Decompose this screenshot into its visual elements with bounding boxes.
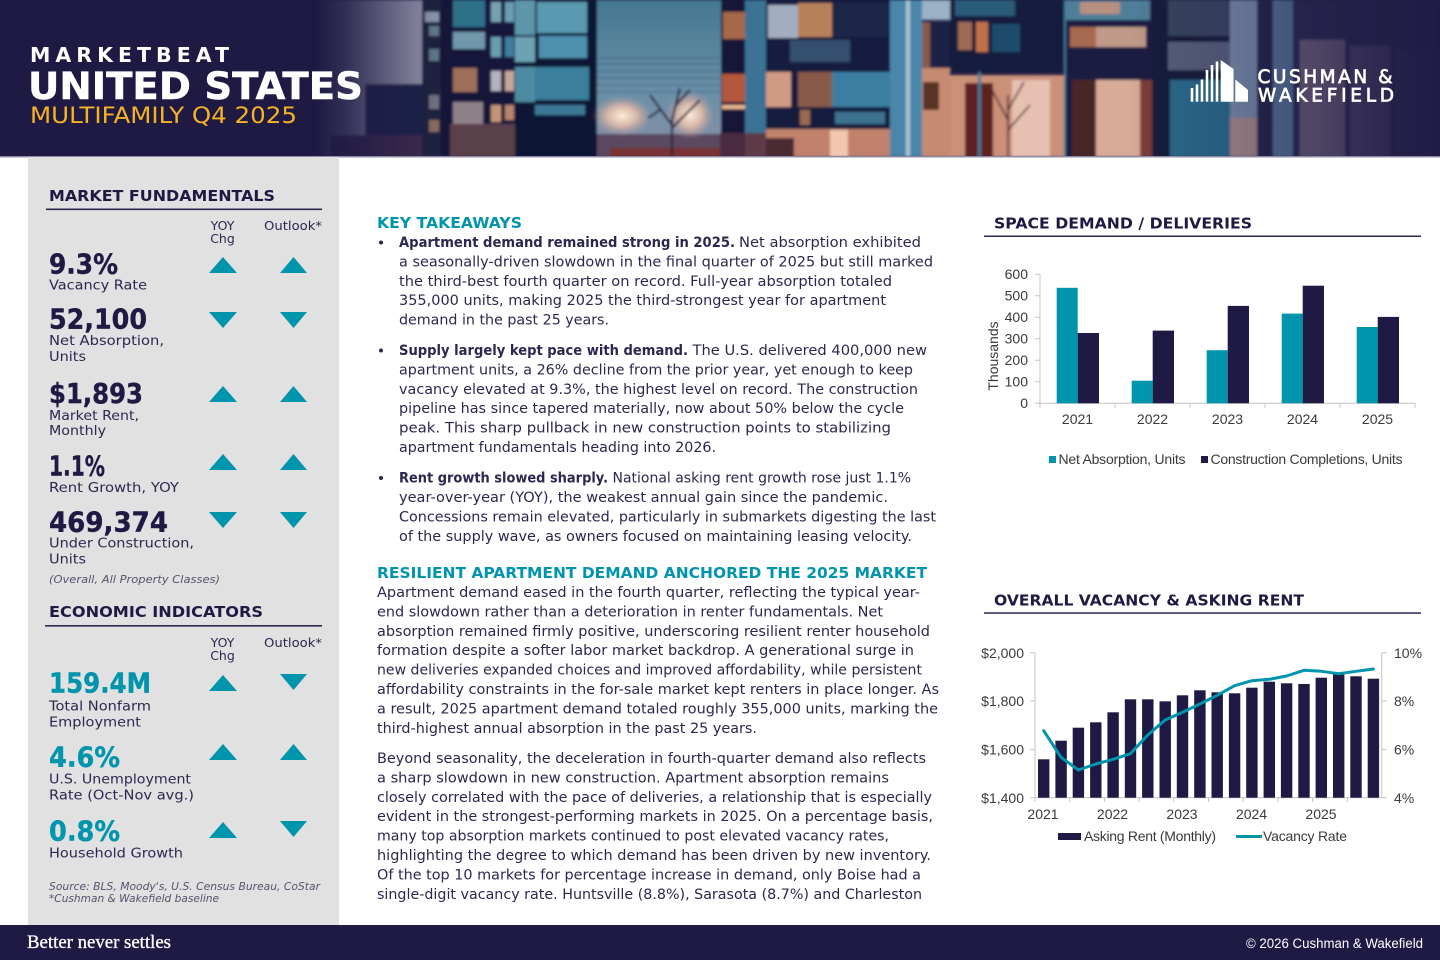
metric: household growth <box>49 814 307 862</box>
x axis labels: 2023 <box>1166 806 1198 822</box>
axes <box>1030 653 1387 802</box>
bullet: apartment demand: the third-best fourth quarter on record. Full-year absorption totaled <box>399 274 892 290</box>
bullet: rent growth: of the supply wave, as owners focused on maintaining leasing velocity. <box>399 529 912 545</box>
footer bar <box>0 925 1440 960</box>
paragraph: fourth quarter demand: affordability constraints in the for-sale market kept renters in place longer. As <box>377 682 939 698</box>
left axis labels: $1,600 <box>981 742 1024 758</box>
x axis labels: 2024 <box>1287 411 1318 427</box>
paragraph: seasonality: closely correlated with the pace of deliveries, a relationship that is especially <box>377 790 932 806</box>
bullet: apartment demand: Net absorption exhibited <box>739 235 921 251</box>
paragraph: seasonality: Of the top 10 markets for percentage increase in demand, only Boise had a <box>377 867 921 883</box>
bullet: apartment demand: 355,000 units, making 2025 the third-strongest year for apartment <box>399 293 886 309</box>
x axis labels: 2025 <box>1305 806 1337 822</box>
metric: rent growth: Rent Growth, YOY <box>49 480 180 496</box>
bullet: supply: vacancy elevated at 9.3%, the highest level on record. The construction <box>399 382 918 398</box>
metric: under construction: 469,374 <box>49 506 168 538</box>
x axis labels: 2022 <box>1097 806 1128 822</box>
bullet: supply: Supply largely kept pace with demand. <box>399 343 688 359</box>
left axis labels <box>981 645 1024 806</box>
photo: apartment buildings at dusk <box>317 0 1440 157</box>
title: UNITED STATES: UNITED STATES <box>28 64 363 108</box>
paragraph: seasonality: highlighting the degree to which demand has been driven by new inventory. <box>377 848 931 864</box>
header banner <box>0 0 1440 158</box>
heading: economic indicators: ECONOMIC INDICATORS <box>49 603 263 621</box>
logo: Cushman & Wakefield: WAKEFIELD <box>1258 86 1394 107</box>
paragraph: fourth quarter demand: Apartment demand eased in the fourth quarter, reflecting the typical year- <box>377 585 920 601</box>
paragraph: seasonality <box>377 751 933 903</box>
report title block <box>28 43 363 129</box>
bullet: rent growth: Concessions remain elevated, particularly in submarkets digesting the last <box>399 509 936 525</box>
metric: unemployment rate: 4.6% <box>49 740 120 774</box>
source note <box>49 881 321 905</box>
metric: household growth: Household Growth <box>49 846 183 862</box>
logo: Cushman & Wakefield: CUSHMAN & <box>1258 67 1392 88</box>
bullet: apartment demand: a seasonally-driven slowdown in the final quarter of 2025 but still marked <box>399 254 933 270</box>
legend <box>1058 828 1347 844</box>
metric: total nonfarm employment: Employment <box>49 714 141 730</box>
y axis labels: 500 <box>1005 288 1028 304</box>
metric: total nonfarm employment <box>48 666 307 730</box>
metric: total nonfarm employment: Total Nonfarm <box>48 698 151 714</box>
axis title: thousands: Thousands <box>985 321 1001 391</box>
y axis labels: 0 <box>1020 395 1028 411</box>
x axis labels: 2023 <box>1212 411 1243 427</box>
metric: net absorption: 52,100 <box>49 302 147 336</box>
paragraph: seasonality: single-digit vacancy rate. Huntsville (8.8%), Sarasota (8.7%) and Charleston <box>377 887 922 903</box>
bullet: rent growth: Rent growth slowed sharply. <box>399 470 608 486</box>
paragraph: fourth quarter demand: new deliveries expanded choices and improved affordability, while persistent <box>377 663 922 679</box>
metric: vacancy rate: 9.3% <box>49 248 118 280</box>
right axis labels: 6% <box>1394 742 1414 758</box>
copyright: © 2026 Cushman & Wakefield <box>1246 936 1423 951</box>
line: vacancy rate <box>1044 669 1373 770</box>
source note: Source: BLS, Moody's, U.S. Census Bureau, CoStar <box>49 881 321 893</box>
x axis labels <box>1027 806 1337 822</box>
paragraph: seasonality: Beyond seasonality, the deceleration in fourth-quarter demand also reflects <box>377 751 926 767</box>
paragraph: seasonality: many top absorption markets continued to post elevated vacancy rates, <box>377 829 889 845</box>
x axis labels: 2024 <box>1236 806 1267 822</box>
bullet: apartment demand <box>379 235 933 329</box>
x axis labels: 2021 <box>1062 411 1093 427</box>
heading: market fundamentals: MARKET FUNDAMENTALS <box>49 187 275 205</box>
legend: Asking Rent (Monthly) <box>1084 828 1216 844</box>
column headers: fundamentals: Chg <box>210 231 235 246</box>
right axis labels: 8% <box>1394 693 1414 709</box>
heading: overall vacancy and asking rent: OVERALL VACANCY & ASKING RENT <box>994 592 1304 610</box>
source note: *Cushman & Wakefield baseline <box>49 893 219 905</box>
bar chart: space demand and deliveries <box>985 266 1415 467</box>
icon: building bars <box>1191 60 1248 102</box>
paragraph: fourth quarter demand: third-highest annual absorption in the past 25 years. <box>377 721 757 737</box>
paragraph: fourth quarter demand: a result, 2025 apartment demand totaled roughly 355,000 units, marking the <box>377 701 938 717</box>
bullet: supply <box>379 343 927 456</box>
column headers: fundamentals: Outlook* <box>264 218 322 233</box>
x axis labels: 2025 <box>1362 411 1393 427</box>
bullet: apartment demand: demand in the past 25 years. <box>399 313 609 329</box>
metric: unemployment rate: Rate (Oct-Nov avg.) <box>49 788 194 804</box>
bullet: supply: apartment units, a 26% decline from the prior year, yet enough to keep <box>399 362 913 378</box>
legend: Vacancy Rate <box>1263 828 1347 844</box>
axes <box>1035 274 1415 408</box>
x axis labels: 2021 <box>1027 806 1059 822</box>
paragraph: fourth quarter demand: end slowdown rather than a deterioration in renter fundamentals. Net <box>377 604 883 620</box>
metric: market rent <box>49 377 307 439</box>
panel: market sidebar <box>28 157 339 925</box>
y axis labels: 400 <box>1005 309 1028 325</box>
logo: Cushman & Wakefield <box>1191 60 1394 107</box>
subtitle: MULTIFAMILY Q4 2025: MULTIFAMILY Q4 2025 <box>30 104 297 129</box>
heading: space demand / deliveries: SPACE DEMAND / DELIVERIES <box>994 214 1252 232</box>
x axis labels <box>1062 411 1393 427</box>
left axis labels: $1,800 <box>981 693 1024 709</box>
metric: under construction <box>49 506 307 568</box>
metric: rent growth: 1.1% <box>49 450 105 482</box>
left axis labels: $2,000 <box>981 645 1024 661</box>
left axis labels: $1,400 <box>981 790 1024 806</box>
paragraph: fourth quarter demand <box>377 585 939 737</box>
metric: market rent: $1,893 <box>49 377 143 410</box>
metric: net absorption: Units <box>49 349 86 365</box>
bullet: rent growth: year-over-year (YOY), the weakest annual gain since the pandemic. <box>399 490 888 506</box>
metric: unemployment rate: U.S. Unemployment <box>49 772 191 788</box>
y axis labels: 300 <box>1005 330 1028 346</box>
y axis labels: 100 <box>1005 374 1028 390</box>
paragraph: fourth quarter demand: absorption remained firmly positive, underscoring resilient renter household <box>377 624 930 640</box>
bullet: supply: pipeline has since tapered materially, now about 50% below the cycle <box>399 401 904 417</box>
metric: net absorption <box>49 302 307 365</box>
tagline: Better never settles <box>27 933 171 953</box>
y axis labels: 200 <box>1005 352 1028 368</box>
bullet: supply: The U.S. delivered 400,000 new <box>691 343 927 359</box>
bullet: rent growth: National asking rent growth rose just 1.1% <box>612 470 911 486</box>
heading: resilient demand: RESILIENT APARTMENT DEMAND ANCHORED THE 2025 MARKET <box>377 564 927 582</box>
text column: key takeaways <box>377 214 936 545</box>
legend: Net Absorption, Units <box>1058 451 1186 467</box>
bars: construction completions <box>1078 286 1399 403</box>
paragraph: seasonality: evident in the strongest-performing markets in 2025. On a percentage basis, <box>377 809 933 825</box>
legend: Construction Completions, Units <box>1210 451 1402 467</box>
note: property classes: (Overall, All Property Classes) <box>49 574 220 586</box>
y axis labels <box>1005 266 1028 411</box>
bars: asking rent <box>1038 674 1379 798</box>
metric: household growth: 0.8% <box>49 814 120 848</box>
bullet: supply: apartment fundamentals heading into 2026. <box>399 440 716 456</box>
paragraph: fourth quarter demand: formation despite a softer labor market backdrop. A generational surge in <box>377 643 914 659</box>
metric: market rent: Market Rent, <box>49 408 139 424</box>
heading: key takeaways: KEY TAKEAWAYS <box>377 214 522 232</box>
right axis labels: 4% <box>1394 790 1414 806</box>
column headers: indicators: Chg <box>210 648 235 663</box>
metric: vacancy rate: Vacancy Rate <box>49 278 147 294</box>
column headers: indicators: Outlook* <box>264 635 322 650</box>
bullet: apartment demand: Apartment demand remained strong in 2025. <box>399 235 735 251</box>
text column: resilient apartment demand <box>377 564 939 903</box>
bullet: supply: peak. This sharp pullback in new construction points to stabilizing <box>399 421 891 437</box>
metric: net absorption: Net Absorption, <box>49 333 164 349</box>
paragraph: seasonality: a sharp slowdown in new construction. Apartment absorption remains <box>377 770 889 786</box>
bullet: rent growth <box>379 470 936 545</box>
right axis labels: 10% <box>1394 645 1422 661</box>
column headers: fundamentals <box>210 218 322 246</box>
metric: under construction: Units <box>49 552 86 568</box>
bars: net absorption <box>1057 288 1378 403</box>
legend <box>1049 451 1402 467</box>
kicker: MARKETBEAT: MARKETBEAT <box>30 43 229 67</box>
metric: under construction: Under Construction, <box>49 536 194 552</box>
column headers: indicators: YOY <box>210 635 235 650</box>
metric: rent growth <box>49 450 307 496</box>
metric: total nonfarm employment: 159.4M <box>49 666 151 700</box>
right axis labels <box>1394 645 1422 806</box>
x axis labels: 2022 <box>1137 411 1168 427</box>
metric: market rent: Monthly <box>49 423 106 439</box>
column headers: fundamentals: YOY <box>210 218 235 233</box>
metric: unemployment rate <box>49 740 307 804</box>
column headers: indicators <box>210 635 322 663</box>
combo chart: asking rent and vacancy rate <box>981 645 1422 844</box>
y axis labels: 600 <box>1005 266 1028 282</box>
metric: vacancy rate <box>49 248 307 294</box>
